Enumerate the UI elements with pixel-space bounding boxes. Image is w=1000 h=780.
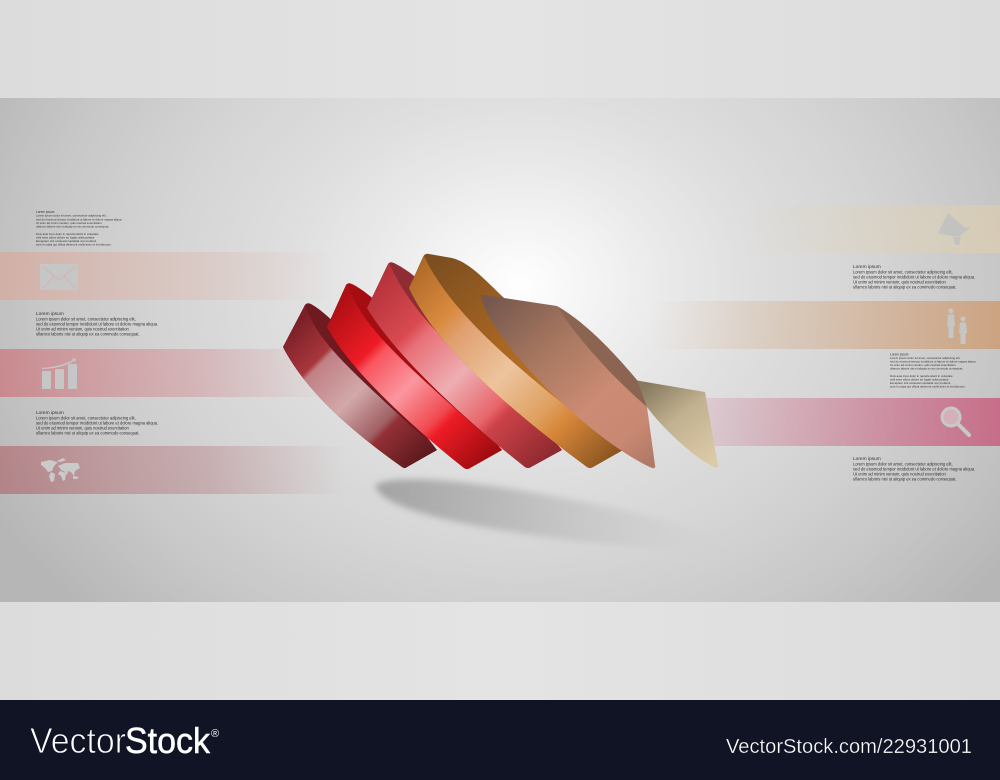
- text block: left 2: ullamco laboris nisi ut aliquip ex ea commodo consequat.: [36, 332, 140, 336]
- text block: right 2 small: [890, 352, 976, 388]
- left strip 1: [0, 252, 335, 300]
- text block: left 1 small: [36, 210, 122, 246]
- slice 5: brown cone: [481, 295, 655, 468]
- text block: right 3: Ut enim ad minim veniam, quis nostrud exercitation: [853, 472, 947, 476]
- left strip 3: [0, 446, 345, 494]
- text block: right 3: [853, 456, 975, 482]
- top band: [0, 0, 1000, 98]
- main panel background: [0, 98, 1000, 602]
- text block: right 2 small: ullamco laboris nisi ut aliquip ex ea commodo consequat.: [890, 367, 963, 371]
- slice 1: dark red: [283, 303, 437, 468]
- text block: right 1: Lorem ipsum: [853, 264, 881, 270]
- text block: right 3: Lorem ipsum: [853, 456, 881, 462]
- icon: growth chart: [42, 358, 77, 389]
- VectorStock logo: ®: [211, 728, 219, 740]
- text block: right 2 small: velit esse cillum dolore eu fugiat nulla pariatur.: [890, 377, 949, 381]
- text block: right 2 small: Ut enim ad minim veniam, quis nostrud exercitation: [890, 363, 956, 367]
- VectorStock logo: Vector: [30, 720, 126, 761]
- slice 3: rose red: [367, 262, 562, 468]
- VectorStock logo: [30, 720, 219, 761]
- text block: right 1: ullamco laboris nisi ut aliquip ex ea commodo consequat.: [853, 284, 957, 290]
- text block: left 1 small: Excepteur sint occaecat cupidatat non proident,: [36, 239, 97, 243]
- text block: left 1 small: velit esse cillum dolore eu fugiat nulla pariatur.: [36, 235, 95, 239]
- icon: envelope: [40, 264, 78, 290]
- right strip 2: [650, 301, 1000, 349]
- text block: left 1 small: sed do eiusmod tempor incididunt ut labore et dolore magna aliqua.: [36, 217, 122, 221]
- text block: right 2 small: sunt in culpa qui officia deserunt mollit anim id est laborum.: [890, 384, 966, 388]
- text block: left 1 small: sunt in culpa qui officia deserunt mollit anim id est laborum.: [36, 242, 112, 246]
- icon: world map: [41, 458, 80, 482]
- text block: left 1 small: Lorem ipsum: [36, 210, 55, 214]
- icon: people: [947, 308, 967, 344]
- text block: left 1 small: ullamco laboris nisi ut aliquip ex ea commodo consequat.: [36, 225, 109, 229]
- text block: right 2 small: sed do eiusmod tempor incididunt ut labore et dolore magna aliqua.: [890, 359, 976, 363]
- right strip 3: [700, 398, 1000, 446]
- text block: left 1 small: Ut enim ad minim veniam, quis nostrud exercitation: [36, 221, 102, 225]
- text block: left 2: Ut enim ad minim veniam, quis nostrud exercitation: [36, 326, 130, 332]
- text block: right 3: Lorem ipsum dolor sit amet, consectetur adipiscing elit,: [853, 461, 953, 466]
- drop shadow: [375, 479, 740, 549]
- text block: right 2 small: Lorem ipsum dolor sit amet, consectetur adipiscing elit,: [890, 356, 961, 360]
- right strip 1: [740, 205, 1000, 253]
- text block: left 3: Lorem ipsum dolor sit amet, consectetur adipiscing elit,: [36, 415, 136, 420]
- text block: right 1: Ut enim ad minim veniam, quis nostrud exercitation: [853, 280, 947, 284]
- text block: right 2 small: Duis aute irure dolor in reprehenderit in voluptate: [890, 374, 953, 378]
- text block: right 3: ullamco laboris nisi ut aliquip ex ea commodo consequat.: [853, 476, 957, 482]
- text block: left 3: sed do eiusmod tempor incididunt ut labore et dolore magna aliqua.: [36, 420, 158, 426]
- footer bar: [0, 700, 1000, 780]
- text block: left 2: [36, 311, 158, 336]
- bottom band: [0, 602, 1000, 700]
- slice 4: orange: [409, 254, 640, 468]
- slice 2: bright red: [327, 283, 502, 469]
- text block: left 2: Lorem ipsum dolor sit amet, consectetur adipiscing elit,: [36, 316, 136, 321]
- text block: right 2 small: Excepteur sint occaecat cupidatat non proident,: [890, 381, 951, 385]
- text block: left 1 small: Lorem ipsum dolor sit amet, consectetur adipiscing elit,: [36, 214, 107, 218]
- text block: right 1: Lorem ipsum dolor sit amet, consectetur adipiscing elit,: [853, 269, 953, 274]
- VectorStock image id: VectorStock.com/22931001: [726, 736, 972, 758]
- text block: right 1: [853, 264, 975, 290]
- text block: right 3: sed do eiusmod tempor incididunt ut labore et dolore magna aliqua.: [853, 466, 975, 472]
- icon: magnifier: [942, 408, 969, 435]
- text block: left 2: Lorem ipsum: [36, 311, 64, 317]
- text block: left 3: Lorem ipsum: [36, 410, 64, 416]
- text block: left 3: [36, 410, 158, 436]
- left strip 2: [0, 349, 330, 397]
- text block: left 3: ullamco laboris nisi ut aliquip ex ea commodo consequat.: [36, 430, 140, 436]
- text block: right 2 small: Lorem ipsum: [890, 352, 909, 356]
- text block: right 1: sed do eiusmod tempor incididunt ut labore et dolore magna aliqua.: [853, 274, 975, 280]
- text block: left 2: sed do eiusmod tempor incididunt ut labore et dolore magna aliqua.: [36, 322, 158, 326]
- slice 6: beige cone: [628, 379, 718, 468]
- text block: left 1 small: Duis aute irure dolor in reprehenderit in voluptate: [36, 232, 99, 236]
- icon: megaphone: [938, 213, 970, 245]
- VectorStock logo: Stock: [125, 720, 211, 761]
- text block: left 3: Ut enim ad minim veniam, quis nostrud exercitation: [36, 426, 130, 430]
